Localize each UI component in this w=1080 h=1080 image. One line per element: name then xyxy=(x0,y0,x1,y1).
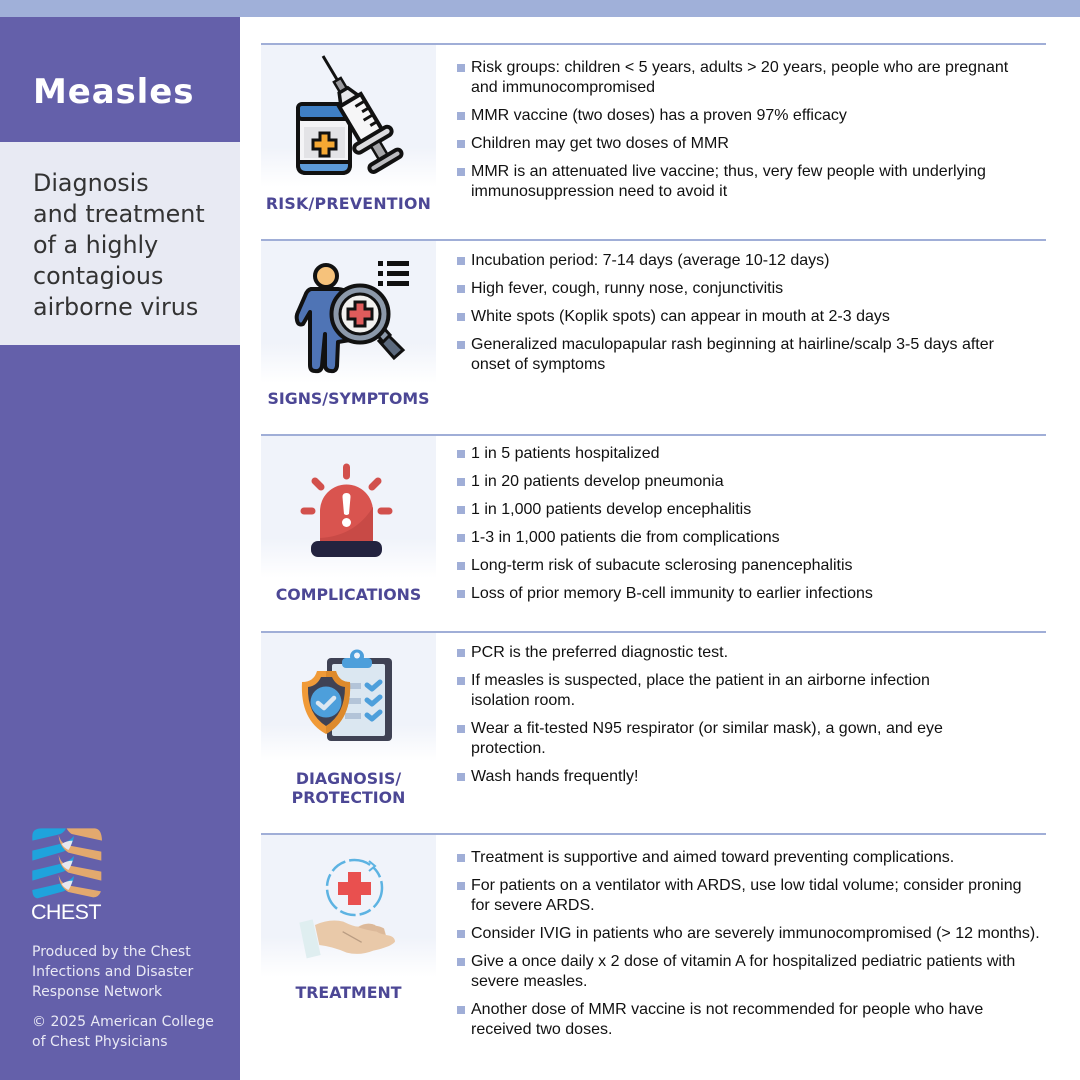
subtitle block: contagious xyxy=(33,262,163,290)
bullet list xyxy=(457,849,1040,1038)
bullet list: protection. xyxy=(471,740,546,757)
section: diagnosis/protection xyxy=(261,631,1046,821)
bullet list: and immunocompromised xyxy=(471,79,655,96)
bullet list: 1 in 5 patients hospitalized xyxy=(471,445,660,462)
bullet list: High fever, cough, runny nose, conjunctivitis xyxy=(471,280,783,297)
icon panel xyxy=(261,835,436,977)
bullet list: 1 in 20 patients develop pneumonia xyxy=(471,473,724,490)
CHEST logo: CHEST xyxy=(31,900,101,924)
section: signs/symptoms xyxy=(261,239,1046,429)
bullet list: Loss of prior memory B-cell immunity to earlier infections xyxy=(471,585,873,602)
bullet list xyxy=(457,644,943,785)
icon: person with magnifier xyxy=(294,261,409,374)
icon panel xyxy=(261,241,436,383)
section: complications xyxy=(261,434,1046,624)
bullet list: Treatment is supportive and aimed toward preventing complications. xyxy=(471,849,954,866)
bullet list: immunosuppression need to avoid it xyxy=(471,183,727,200)
bullet list: received two doses. xyxy=(471,1021,612,1038)
icon: clipboard and shield xyxy=(302,650,392,741)
section: risk/prevention xyxy=(261,43,1046,233)
label: PROTECTION xyxy=(292,788,405,807)
copyright: © 2025 American College xyxy=(32,1014,214,1030)
bullet list: Risk groups: children < 5 years, adults > 20 years, people who are pregnant xyxy=(471,59,1008,76)
bullet list: for severe ARDS. xyxy=(471,897,595,914)
copyright xyxy=(32,1014,214,1050)
CHEST logo xyxy=(31,828,102,924)
bullet list: Consider IVIG in patients who are severely immunocompromised (> 12 months). xyxy=(471,925,1040,942)
bullet list xyxy=(457,445,873,602)
bullet list: PCR is the preferred diagnostic test. xyxy=(471,644,728,661)
subtitle block: and treatment xyxy=(33,200,205,228)
sidebar panel xyxy=(0,17,240,1080)
bullet list: Another dose of MMR vaccine is not recommended for people who have xyxy=(471,1001,983,1018)
icon: hand with medical cross xyxy=(300,858,395,958)
bullet list xyxy=(457,252,994,373)
top banner xyxy=(0,0,1080,17)
label: SIGNS/SYMPTOMS xyxy=(267,389,430,408)
footer credit: Infections and Disaster xyxy=(32,964,193,980)
bullet list xyxy=(457,59,1008,200)
bullet list: onset of symptoms xyxy=(471,356,605,373)
bullet list: 1 in 1,000 patients develop encephalitis xyxy=(471,501,751,518)
icon: vaccine and syringe xyxy=(296,55,404,175)
subtitle block: Diagnosis xyxy=(33,169,149,197)
footer credit xyxy=(32,944,194,1000)
bullet list: Children may get two doses of MMR xyxy=(471,135,729,152)
icon panel xyxy=(261,45,436,187)
label: TREATMENT xyxy=(295,983,402,1002)
bullet list: Incubation period: 7-14 days (average 10-12 days) xyxy=(471,252,829,269)
bullet list: If measles is suspected, place the patient in an airborne infection xyxy=(471,672,930,689)
footer credit: Response Network xyxy=(32,984,162,1000)
bullet list: Give a once daily x 2 dose of vitamin A for hospitalized pediatric patients with xyxy=(471,953,1015,970)
footer credit: Produced by the Chest xyxy=(32,944,191,960)
copyright: of Chest Physicians xyxy=(32,1034,168,1050)
label: DIAGNOSIS/ xyxy=(296,769,401,788)
bullet list: Generalized maculopapular rash beginning at hairline/scalp 3-5 days after xyxy=(471,336,994,353)
bullet list: For patients on a ventilator with ARDS, use low tidal volume; consider proning xyxy=(471,877,1022,894)
title: Measles xyxy=(33,72,194,112)
subtitle block xyxy=(0,142,240,345)
subtitle block: airborne virus xyxy=(33,293,198,321)
bullet list: White spots (Koplik spots) can appear in mouth at 2-3 days xyxy=(471,308,890,325)
subtitle block: of a highly xyxy=(33,231,158,259)
bullet list: Long-term risk of subacute sclerosing panencephalitis xyxy=(471,557,853,574)
label: RISK/PREVENTION xyxy=(266,194,431,213)
icon panel xyxy=(261,436,436,578)
bullet list: MMR vaccine (two doses) has a proven 97% efficacy xyxy=(471,107,847,124)
section: treatment xyxy=(261,833,1046,1043)
bullet list: severe measles. xyxy=(471,973,588,990)
bullet list: MMR is an attenuated live vaccine; thus, very few people with underlying xyxy=(471,163,986,180)
label xyxy=(292,769,405,807)
icon: alarm siren xyxy=(300,464,392,557)
label: COMPLICATIONS xyxy=(276,585,421,604)
bullet list: Wash hands frequently! xyxy=(471,768,638,785)
bullet list: isolation room. xyxy=(471,692,575,709)
icon panel xyxy=(261,633,436,761)
bullet list: 1-3 in 1,000 patients die from complications xyxy=(471,529,780,546)
bullet list: Wear a fit-tested N95 respirator (or similar mask), a gown, and eye xyxy=(471,720,943,737)
